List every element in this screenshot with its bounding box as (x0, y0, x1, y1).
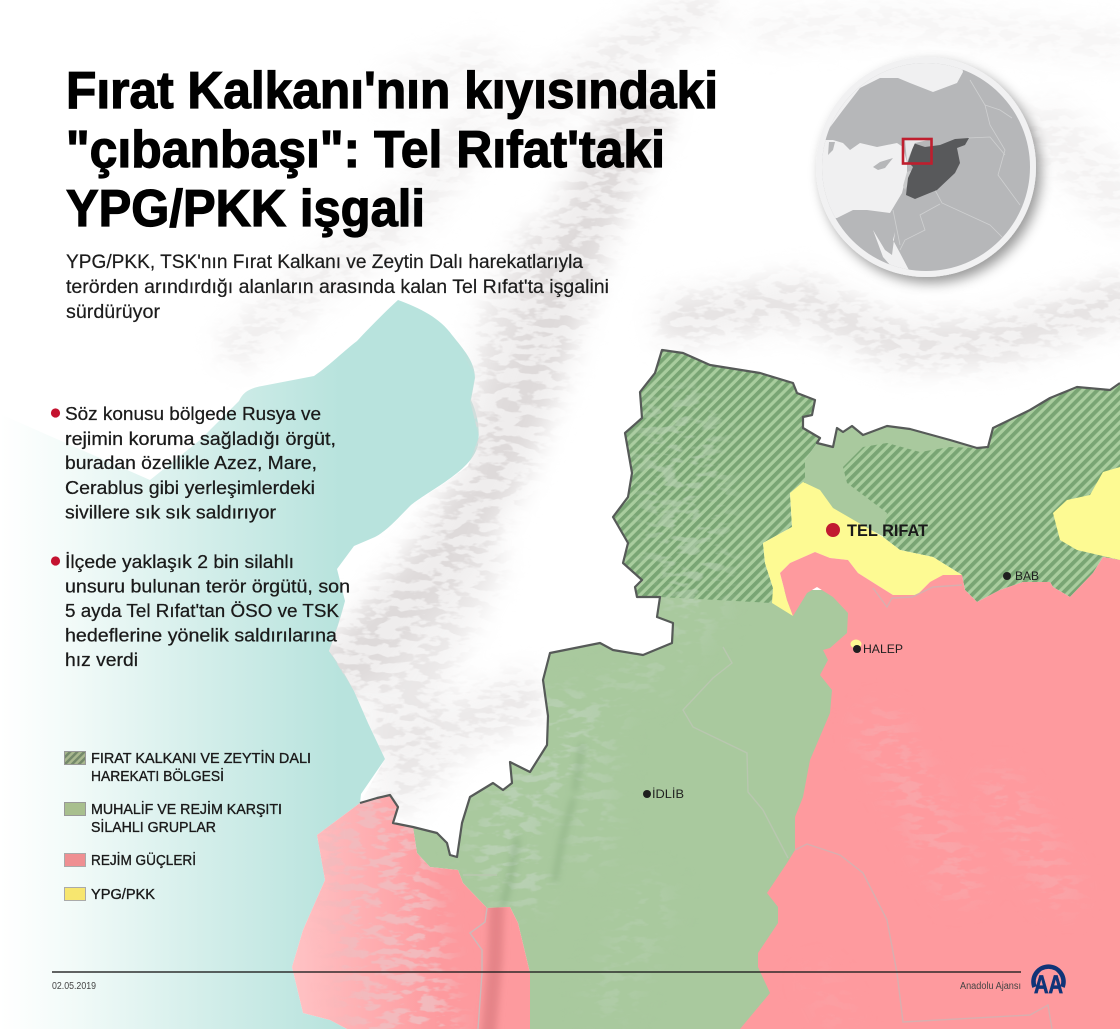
globe rim (816, 57, 1036, 277)
bullet text 2 (51, 551, 350, 670)
legend: REJİM GÜÇLERİ (91, 851, 196, 869)
legend swatch: opposition (64, 802, 86, 816)
legend: FIRAT KALKANI VE ZEYTİN DALI (91, 749, 311, 767)
Hatay inset (905, 140, 928, 162)
bullet marker 2 (51, 556, 60, 566)
legend: YPG/PKK (91, 886, 155, 903)
logo: Anadolu Agency: AA (1034, 971, 1063, 999)
title: "çıbanbaşı": Tel Rıfat'taki (66, 121, 665, 179)
bullet text 2: hedeflerine yönelik saldırılarına (65, 624, 338, 646)
bullet text 1: Cerablus gibi yerleşimlerdeki (65, 477, 315, 498)
legend swatch: regime (64, 854, 86, 866)
region: opposition armed groups, main green (413, 590, 848, 1029)
legend (64, 749, 311, 903)
bullet text 1: sivillere sık sık saldırıyor (65, 502, 276, 522)
bullet text 1: Söz konusu bölgede Rusya ve (65, 403, 321, 424)
Lebanon (903, 170, 912, 190)
bullet text 2: 5 ayda Tel Rıfat'tan ÖSO ve TSK (65, 600, 340, 621)
legend: HAREKATI BÖLGESİ (91, 767, 224, 785)
subtitle: sürdürüyor (66, 302, 161, 323)
footer rule (52, 971, 1021, 973)
legend swatch: YPG/PKK (64, 888, 86, 900)
locator square (903, 139, 932, 164)
bullet text 1: buradan özellikle Azez, Mare, (65, 452, 317, 473)
region: Afrin hatched zone (614, 352, 818, 603)
bullet text 2: İlçede yaklaşık 2 bin silahlı (65, 551, 294, 572)
label: Bab (1003, 571, 1039, 583)
legend: SİLAHLI GRUPLAR (91, 818, 216, 836)
subtitle: terörden arındırdığı alanların arasında kalan Tel Rıfat'ta işgalini (66, 277, 609, 298)
date: 02.05.2019 (52, 981, 96, 992)
national borders (463, 585, 1052, 1029)
subtitle: YPG/PKK, TSK'nın Fırat Kalkanı ve Zeytin Dalı harekatlarıyla (66, 252, 583, 273)
label: Halep: HALEP (863, 642, 903, 656)
locator globe (810, 50, 1036, 277)
label: Tel Rifat: TEL RIFAT (847, 521, 929, 540)
Syria (906, 138, 969, 199)
region: regime forces east (740, 552, 1120, 1029)
legend: MUHALİF VE REJİM KARŞITI (91, 800, 282, 818)
terrain relief on land (221, 0, 1120, 814)
credit: Anadolu Ajansı (960, 981, 1021, 992)
sea: Mediterranean (0, 300, 479, 1029)
region: YPG/PKK east (1053, 467, 1120, 560)
frontier outline (360, 350, 1120, 857)
label: Halep (850, 640, 903, 656)
subtitle (66, 252, 609, 323)
legend swatch: hatched zone (64, 752, 86, 764)
region: YPG/PKK Tel Rifat (763, 482, 962, 616)
title: YPG/PKK işgali (66, 180, 425, 238)
title (66, 62, 718, 238)
label: Idlib: İDLİB (652, 787, 684, 801)
bullet text 2: unsuru bulunan terör örgütü, son (65, 576, 350, 596)
bullet text 1 (51, 403, 336, 522)
region: Euphrates Shield hatched zone (843, 383, 1120, 602)
title: Fırat Kalkanı'nın kıyısındaki (66, 62, 718, 120)
label: Bab: BAB (1015, 571, 1039, 583)
region: opposition corridor north (805, 426, 977, 540)
bullet text 2: hız verdi (65, 649, 138, 670)
bullet marker 1 (51, 408, 60, 418)
region: regime forces west (292, 796, 530, 1029)
globe map (822, 63, 1030, 271)
bullet text 1: rejimin koruma sağladığı örgüt, (65, 428, 336, 449)
